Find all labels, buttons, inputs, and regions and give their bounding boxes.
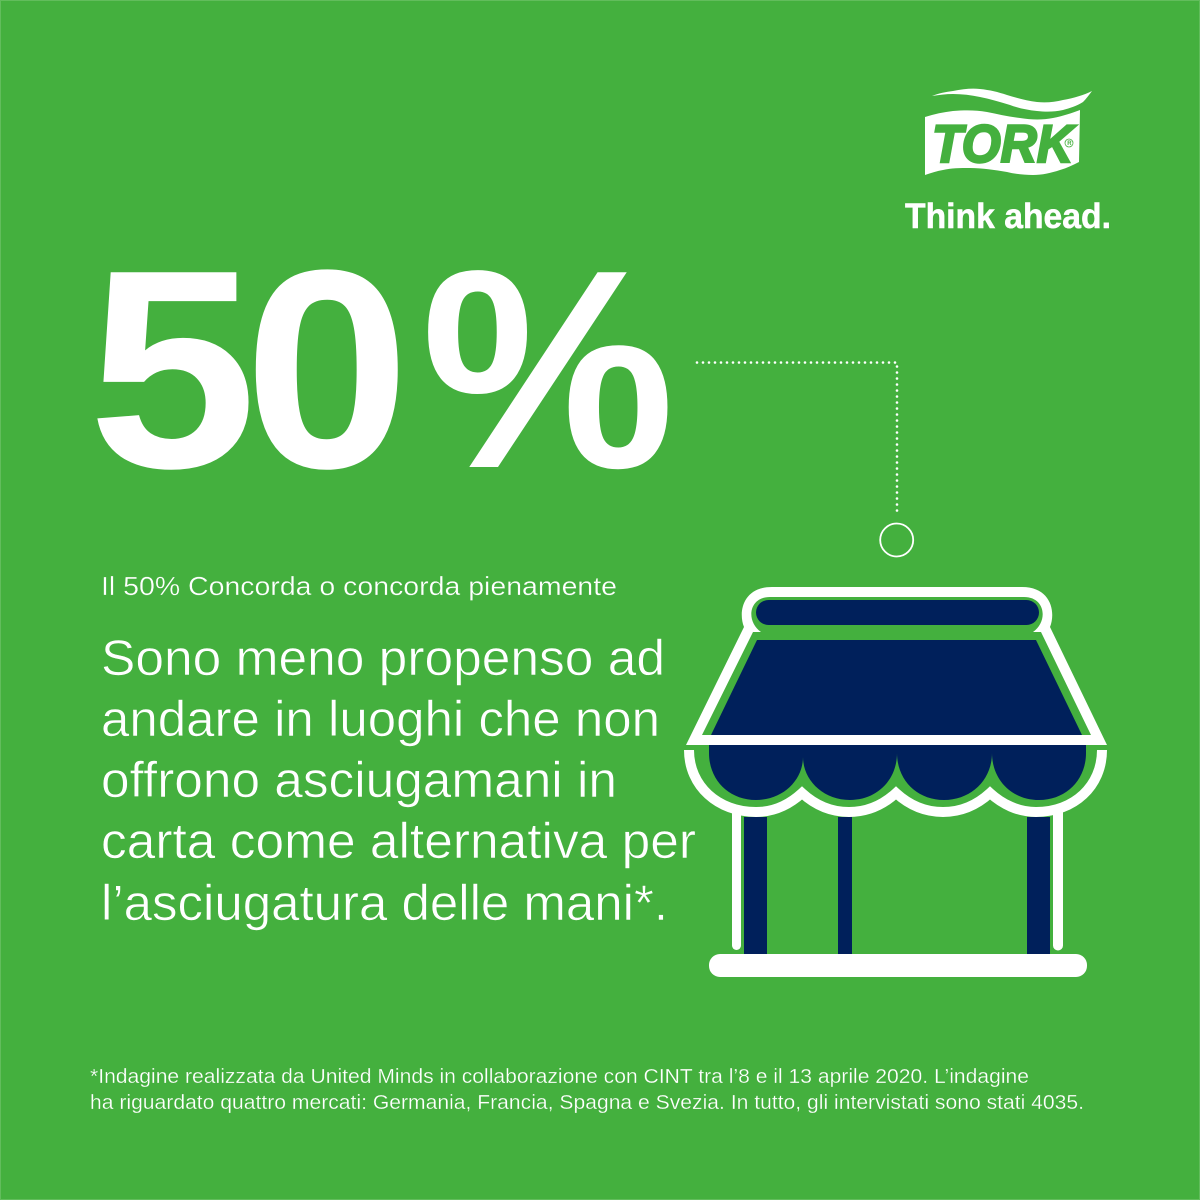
icon: shop with awning: [686, 587, 1107, 977]
logo: Tork: R: [1067, 141, 1072, 147]
main statement: andare in luoghi che non: [101, 691, 660, 747]
footnote: [90, 1066, 1084, 1114]
awning outline: [686, 587, 1107, 745]
logo: Tork: [925, 89, 1092, 175]
big statistic: 50%: 5: [88, 211, 257, 527]
logo: Tork: TORK: [932, 115, 1077, 174]
right post: [1027, 817, 1050, 955]
main statement: carta come alternativa per: [101, 813, 696, 869]
subtitle: Il 50% Concorda o concorda pienamente: [101, 571, 617, 601]
awning scallops: [709, 745, 1086, 800]
middle post: [838, 817, 852, 955]
main statement: Sono meno propenso ad: [101, 630, 665, 686]
main statement: offrono asciugamani in: [101, 752, 617, 808]
main statement: l’asciugatura delle mani*.: [101, 875, 668, 931]
big statistic: 50%: 0: [244, 211, 410, 527]
footnote: *Indagine realizzata da United Minds in collaborazione con CINT tra l’8 e il 13 aprile 2020. L’indagine: [90, 1066, 1029, 1088]
awning top roll: [756, 600, 1039, 625]
connector circle: [880, 524, 913, 556]
footnote: ha riguardato quattro mercati: Germania, Francia, Spagna e Svezia. In tutto, gli intervistati sono stati 4035.: [90, 1092, 1084, 1114]
scallop outline: [689, 750, 1102, 812]
dotted connector: [697, 362, 897, 513]
big statistic: 50%: [88, 211, 675, 527]
base: [709, 954, 1087, 977]
awning body: [711, 640, 1082, 735]
main statement: [101, 630, 696, 931]
left post: [732, 812, 741, 950]
big statistic: 50%: %: [421, 211, 675, 527]
tagline: Think ahead.: [905, 197, 1111, 236]
